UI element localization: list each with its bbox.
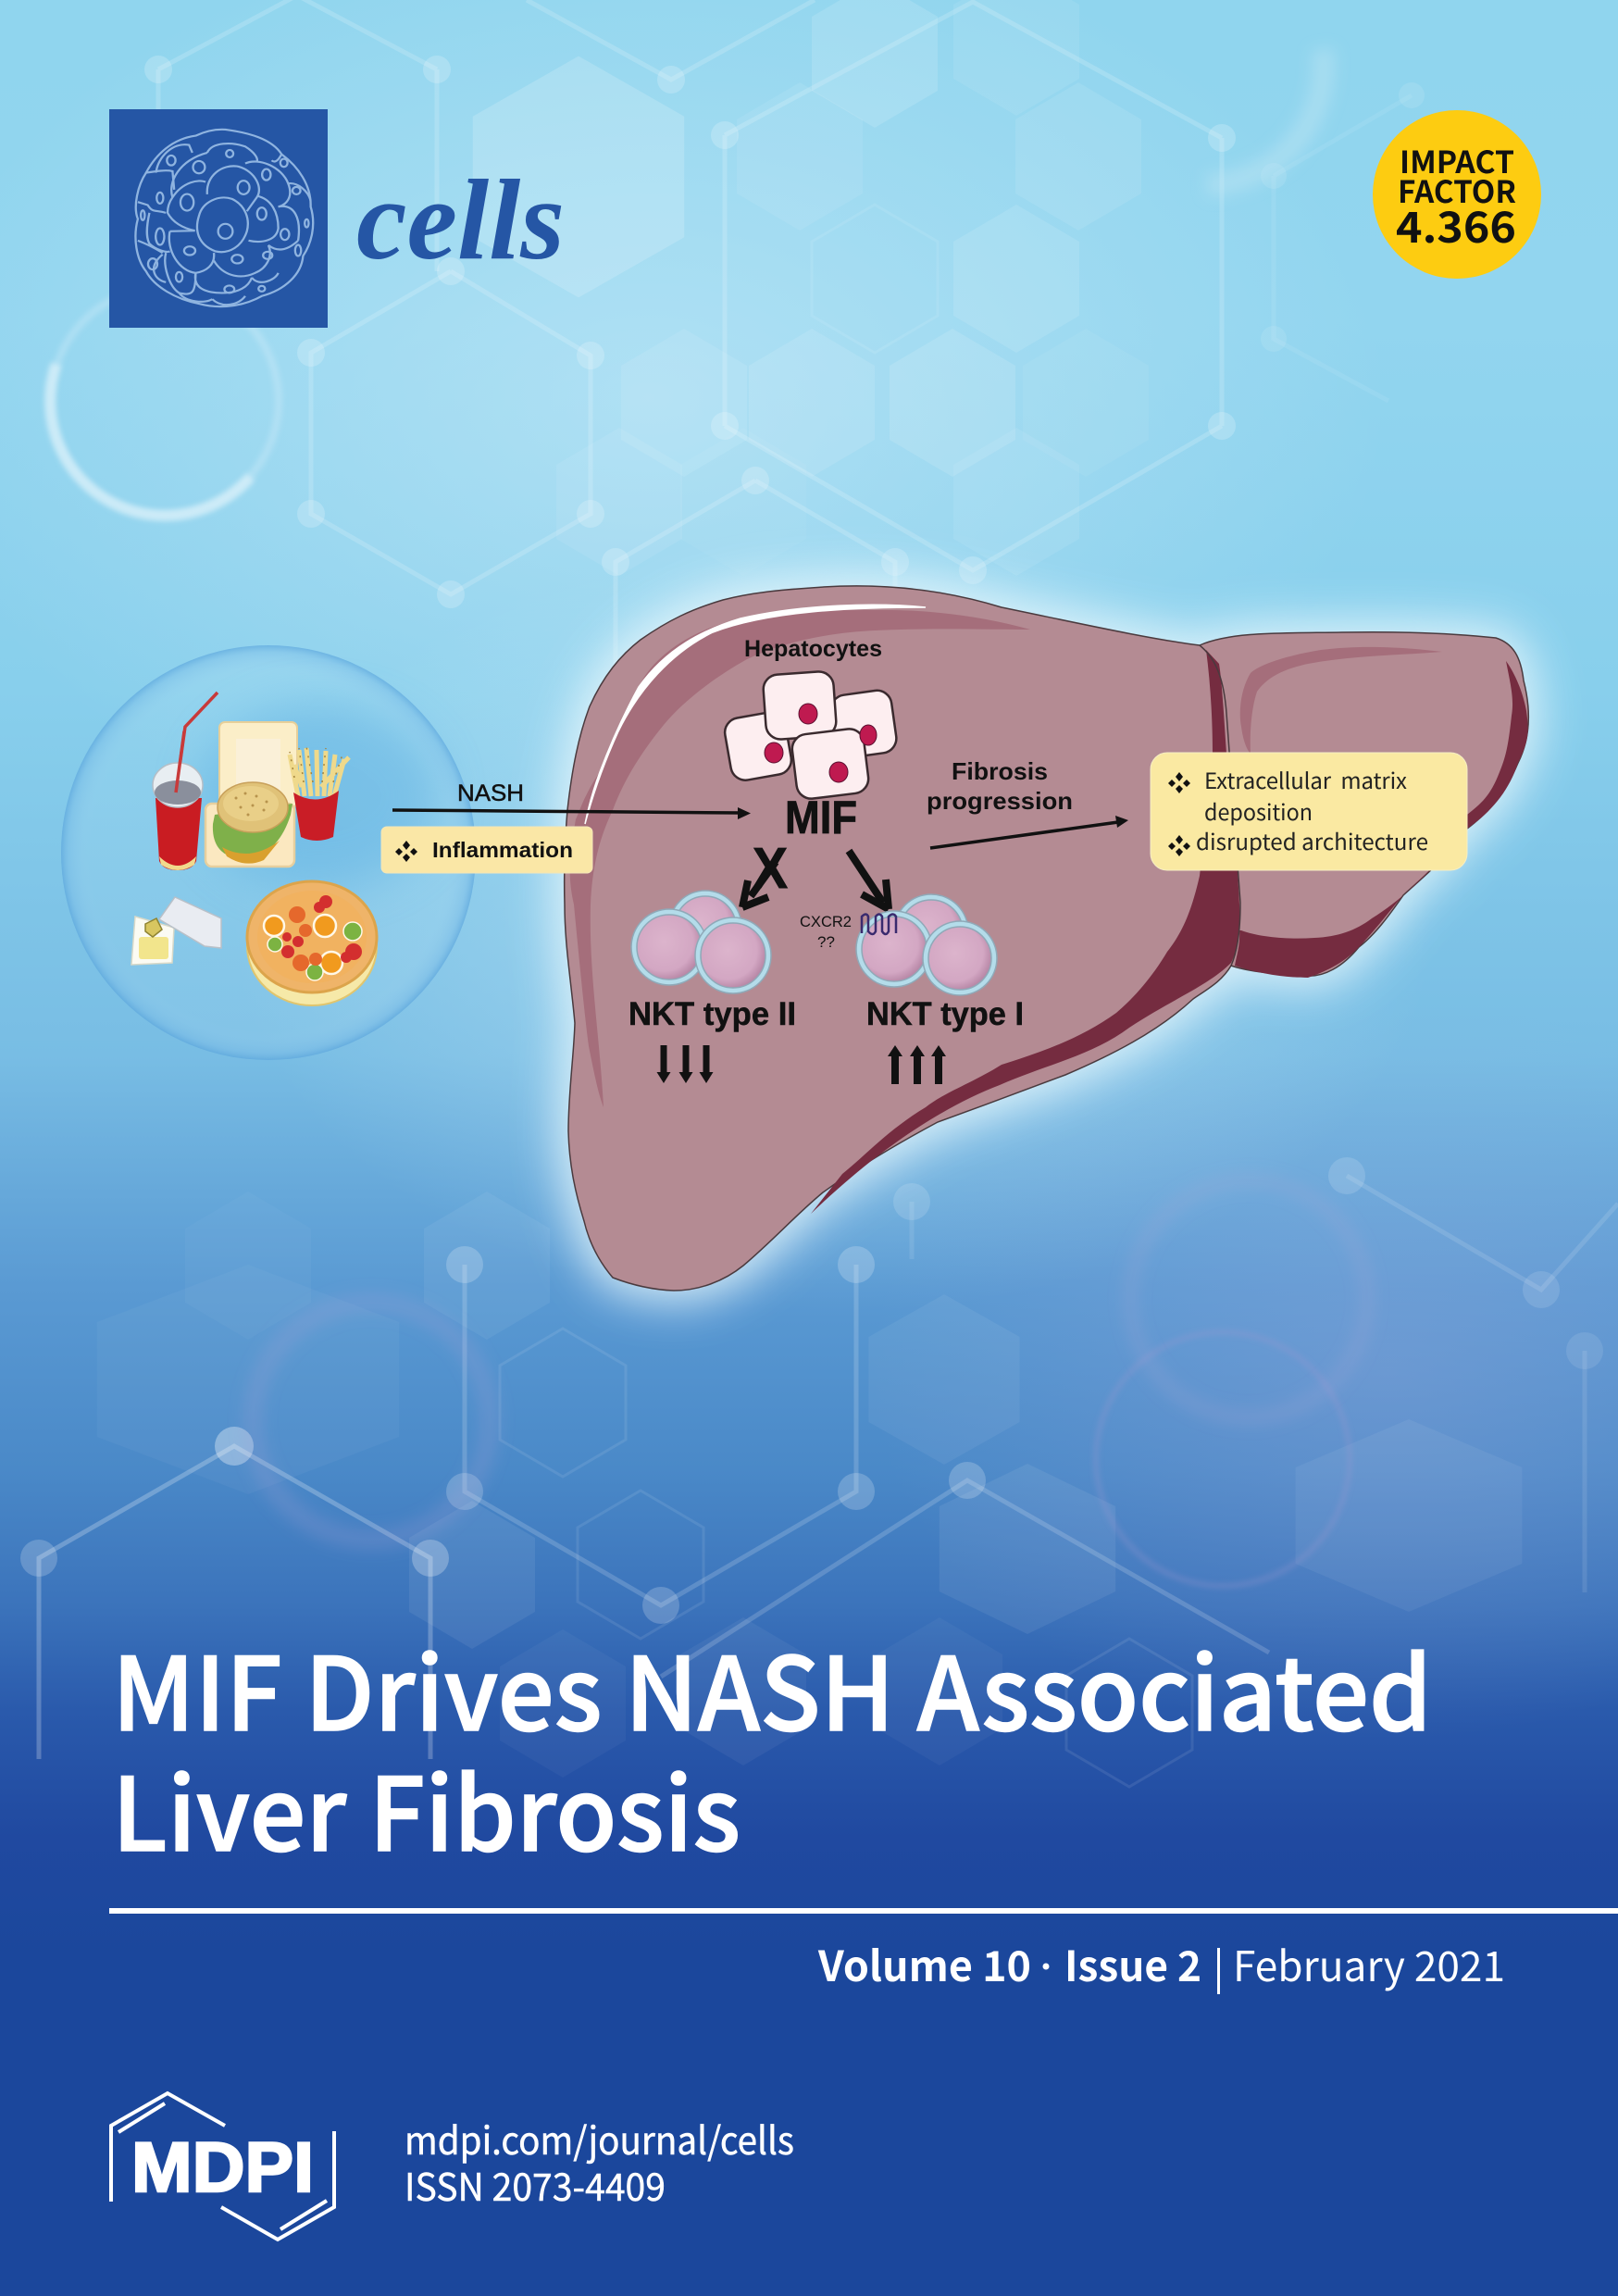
MDPI logo xyxy=(111,2093,334,2240)
light tint left edge behind food xyxy=(231,537,1435,1315)
issue line: Volume 10 xyxy=(817,1933,1031,1993)
fibrosis outcome callout: disrupted architecture xyxy=(1196,824,1428,856)
hexagon outline xyxy=(111,2093,334,2240)
blocking X: X xyxy=(753,837,788,901)
hepatocyte nuclei xyxy=(765,704,877,782)
liver body xyxy=(565,586,1528,1291)
fibrosis outcome callout xyxy=(1151,753,1467,870)
icon: fruit pie xyxy=(247,881,377,1005)
icon: burger box xyxy=(205,722,297,867)
impact factor label line 2: FACTOR xyxy=(1398,168,1516,212)
inflammation text: Inflammation xyxy=(432,838,573,862)
background hexagon outlines xyxy=(500,205,1192,1787)
background translucent bubbles xyxy=(50,0,1367,1586)
icon: soda cup xyxy=(153,693,218,870)
bubble xyxy=(61,645,476,1060)
bullet 2 xyxy=(1168,835,1190,856)
bubble inner shade xyxy=(199,704,440,889)
NKT type I cells xyxy=(856,894,997,995)
lobe divider line xyxy=(1200,645,1240,966)
right lobe maroon edge xyxy=(1235,661,1528,978)
arrow to NKT type I xyxy=(849,851,889,909)
hepatocyte right xyxy=(829,689,898,759)
left lobe maroon edge xyxy=(811,650,1239,1214)
light tint upper area xyxy=(0,0,1388,880)
icon: french fries xyxy=(290,746,349,841)
title rule xyxy=(109,1908,1618,1914)
ISSN: ISSN 2073-4409 xyxy=(404,2156,666,2212)
MDPI wordmark: MDPI xyxy=(131,2128,314,2207)
title xyxy=(112,1615,1432,1880)
impact factor value: 4.366 xyxy=(1396,194,1516,256)
title: Liver Fibrosis xyxy=(112,1735,741,1880)
lavender tint right side xyxy=(870,1000,1618,1741)
fibrosis progression label: Fibrosis xyxy=(952,757,1048,785)
impact factor badge xyxy=(1373,110,1541,279)
NASH arrow xyxy=(392,807,751,819)
question marks: ?? xyxy=(817,933,835,951)
up arrows xyxy=(888,1045,946,1084)
journal logo square xyxy=(109,109,328,328)
panel: food bubble xyxy=(61,645,476,1060)
NKT type II label: NKT type II xyxy=(629,996,796,1032)
icon: butter dish xyxy=(131,897,221,965)
NASH label: NASH xyxy=(457,780,524,806)
CXCR2 label: CXCR2 xyxy=(800,913,852,930)
journal website: mdpi.com/journal/cells xyxy=(404,2110,794,2165)
title: MIF Drives NASH Associated xyxy=(112,1615,1432,1760)
hepatocyte cells xyxy=(723,670,898,800)
fibrosis outcome callout: deposition xyxy=(1204,794,1313,827)
callout text: Extracellular matrix xyxy=(1204,763,1407,795)
issue line xyxy=(817,1933,1505,1994)
background hexagon pattern xyxy=(97,0,1522,1778)
fibrosis progression label: progression xyxy=(927,787,1073,815)
liver highlight xyxy=(585,605,926,824)
background network nodes xyxy=(20,56,1603,1624)
liver glow xyxy=(565,586,1528,1291)
liver upper left shading xyxy=(570,610,1030,1107)
NKT type I label: NKT type I xyxy=(866,996,1024,1032)
fibrosis arrow xyxy=(930,816,1128,848)
fibrosis progression label xyxy=(927,757,1073,815)
background molecular network lines xyxy=(39,0,1618,1759)
bullet 1 xyxy=(1168,772,1190,793)
bullet xyxy=(395,841,417,862)
down arrows xyxy=(657,1045,713,1083)
issue line: Issue 2 xyxy=(1064,1933,1201,1993)
MIF label: MIF xyxy=(785,792,857,843)
NKT type II cells xyxy=(631,891,771,993)
hepatocyte bottom xyxy=(790,728,870,800)
hepatocytes label: Hepatocytes xyxy=(744,636,882,662)
hepatocyte top xyxy=(763,670,837,741)
panel: liver diagram xyxy=(381,586,1528,1291)
journal name: cells xyxy=(356,156,565,283)
inflammation callout xyxy=(381,827,592,873)
icon: cell cluster xyxy=(135,130,313,306)
issue line: February 2021 xyxy=(1233,1933,1505,1993)
blocked arrow to NKT type II xyxy=(742,837,788,907)
impact factor label: IMPACT xyxy=(1400,138,1514,182)
CXCR2 receptor xyxy=(862,915,896,934)
right lobe upper shading xyxy=(1240,647,1442,754)
